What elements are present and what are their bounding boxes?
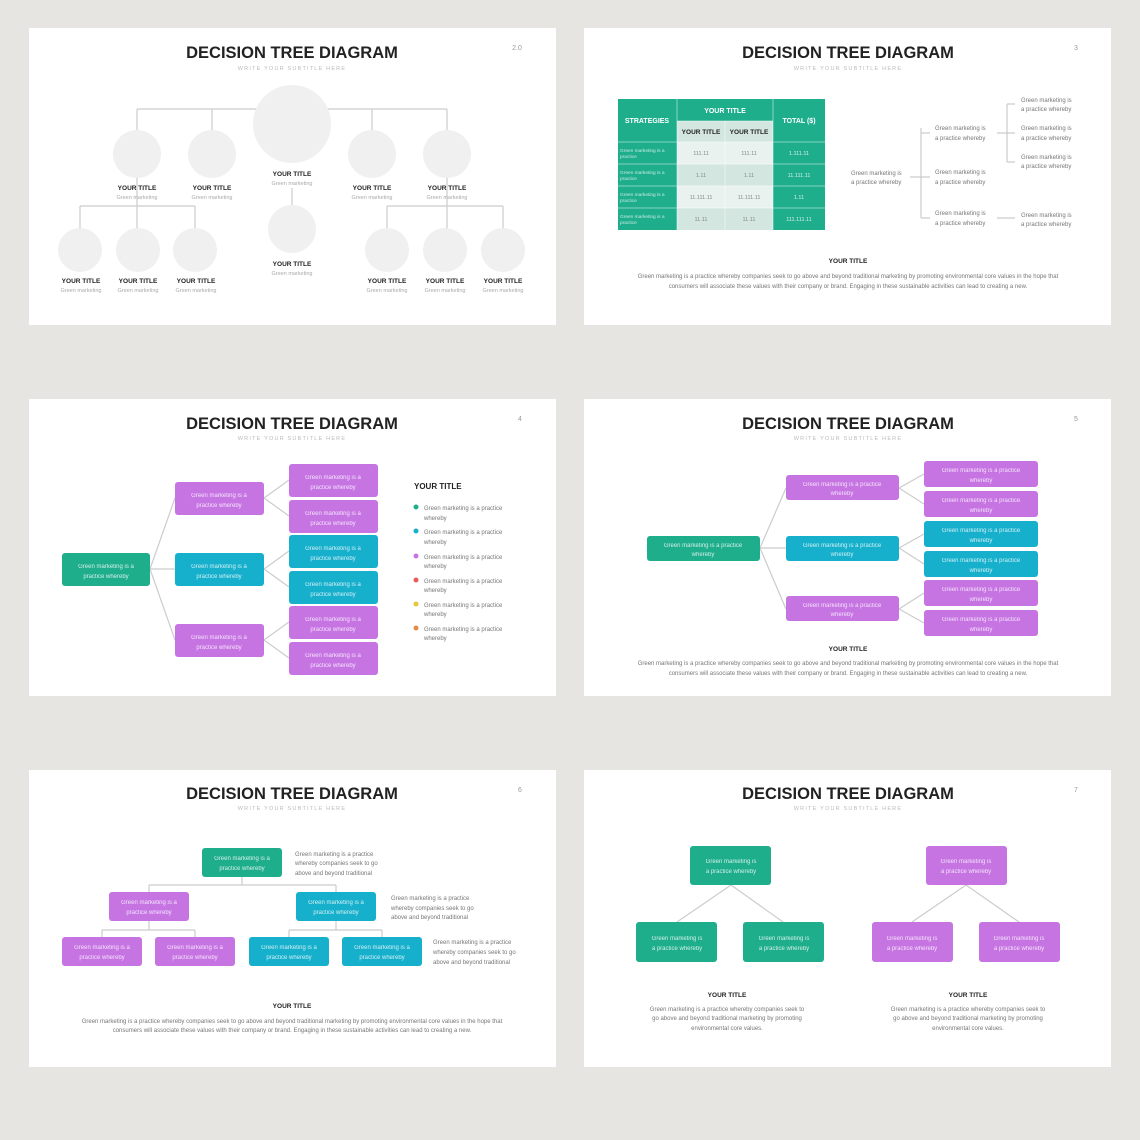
- tree boxes: Green marketing is a practice: [942, 498, 1021, 504]
- legend: whereby: [423, 516, 447, 522]
- purple tree: Green marketing is: [941, 859, 991, 865]
- tree boxes: whereby: [969, 508, 992, 514]
- side notes: above and beyond traditional: [433, 960, 510, 966]
- bracket tree: [851, 98, 1072, 228]
- node labels: Green marketing: [425, 288, 465, 294]
- table: 11.111.11: [788, 173, 810, 179]
- tree boxes: Green marketing is a: [78, 564, 135, 570]
- bracket tree: a practice whereby: [1021, 136, 1071, 142]
- legend: whereby: [423, 636, 447, 642]
- text blocks: Green marketing is a practice whereby companies seek to: [891, 1007, 1046, 1013]
- title: DECISION TREE DIAGRAM: [186, 415, 398, 433]
- page number: 7: [1074, 787, 1078, 794]
- table: 11.111.11: [690, 195, 712, 201]
- text blocks: Green marketing is a practice whereby companies seek to: [650, 1007, 805, 1013]
- tree boxes: Green marketing is a practice: [803, 603, 882, 609]
- bracket tree: a practice whereby: [1021, 107, 1071, 113]
- tree boxes: Green marketing is a practice: [942, 617, 1021, 623]
- table: 11.11: [743, 217, 755, 223]
- node labels: YOUR TITLE: [119, 278, 158, 285]
- table: 111.11: [693, 151, 709, 157]
- tree boxes: Green marketing is a practice: [803, 543, 882, 549]
- node labels: Green marketing: [483, 288, 523, 294]
- text block: Green marketing is a practice whereby companies seek to go above and beyond traditional marketing by promoting environmental core values in the hope that: [638, 661, 1059, 667]
- node labels: YOUR TITLE: [193, 185, 232, 192]
- green tree: Green marketing is: [652, 936, 702, 942]
- green tree: a practice whereby: [706, 869, 756, 875]
- table: 1.11: [696, 173, 706, 179]
- legend: whereby: [423, 564, 447, 570]
- bracket tree: Green marketing is: [851, 171, 902, 177]
- tree boxes: Green marketing is a: [305, 546, 362, 552]
- legend: Green marketing is a practice: [424, 506, 503, 512]
- subtitle: WRITE YOUR SUBTITLE HERE: [238, 806, 346, 812]
- node labels: Green marketing: [272, 271, 312, 277]
- tree boxes: practice whereby: [196, 645, 242, 651]
- text block: [82, 1003, 503, 1034]
- node labels: Green marketing: [176, 288, 216, 294]
- table: YOUR TITLE: [730, 129, 769, 136]
- tree boxes: Green marketing is a practice: [942, 558, 1021, 564]
- node labels: YOUR TITLE: [273, 261, 312, 268]
- text block: YOUR TITLE: [829, 646, 868, 653]
- side notes: whereby companies seek to go: [294, 861, 378, 867]
- tree boxes: practice whereby: [310, 663, 356, 669]
- text block: [638, 646, 1059, 677]
- node labels: YOUR TITLE: [428, 185, 467, 192]
- node labels: YOUR TITLE: [368, 278, 407, 285]
- tree boxes: Green marketing is a: [305, 617, 362, 623]
- tree boxes: practice whereby: [126, 910, 172, 916]
- bracket tree: Green marketing is: [935, 170, 986, 176]
- tree boxes: practice whereby: [172, 955, 218, 961]
- bracket tree: Green marketing is: [1021, 213, 1072, 219]
- tree boxes: practice whereby: [310, 485, 356, 491]
- table: [618, 99, 825, 230]
- title: DECISION TREE DIAGRAM: [186, 785, 398, 803]
- tree boxes: practice whereby: [79, 955, 125, 961]
- tree boxes: practice whereby: [196, 574, 242, 580]
- tree boxes: Green marketing is a: [305, 653, 362, 659]
- table: 1.11: [794, 195, 804, 201]
- tree boxes: Green marketing is a: [121, 900, 178, 906]
- bracket tree: a practice whereby: [851, 180, 901, 186]
- tree boxes: whereby: [830, 612, 853, 618]
- legend: whereby: [423, 612, 447, 618]
- text block: Green marketing is a practice whereby companies seek to go above and beyond traditional marketing by promoting environmental core values in the hope that: [638, 274, 1059, 280]
- subtitle: WRITE YOUR SUBTITLE HERE: [794, 66, 902, 72]
- title: DECISION TREE DIAGRAM: [186, 44, 398, 62]
- bracket tree: Green marketing is: [1021, 126, 1072, 132]
- legend: Green marketing is a practice: [424, 555, 503, 561]
- purple tree: [872, 846, 1060, 962]
- tree boxes: Green marketing is a: [354, 945, 411, 951]
- bracket tree: a practice whereby: [1021, 222, 1071, 228]
- side notes: Green marketing is a practice: [433, 940, 512, 946]
- purple tree: a practice whereby: [994, 946, 1044, 952]
- text block: [638, 258, 1059, 290]
- legend: whereby: [423, 588, 447, 594]
- tree boxes: Green marketing is a practice: [942, 468, 1021, 474]
- text blocks: [650, 992, 1046, 1032]
- table: TOTAL ($): [782, 118, 816, 125]
- node labels: YOUR TITLE: [62, 278, 101, 285]
- title: DECISION TREE DIAGRAM: [742, 785, 954, 803]
- page number: 4: [518, 416, 522, 423]
- node labels: Green marketing: [192, 195, 232, 201]
- bracket tree: Green marketing is: [935, 126, 986, 132]
- legend: Green marketing is a practice: [424, 579, 503, 585]
- table: YOUR TITLE: [704, 108, 746, 115]
- node labels: Green marketing: [118, 288, 158, 294]
- tree boxes: Green marketing is a: [191, 564, 248, 570]
- tree boxes: Green marketing is a practice: [942, 528, 1021, 534]
- node labels: Green marketing: [367, 288, 407, 294]
- tree boxes: practice whereby: [310, 521, 356, 527]
- tree boxes: whereby: [691, 552, 714, 558]
- side notes: whereby companies seek to go: [390, 906, 474, 912]
- node labels: Green marketing: [352, 195, 392, 201]
- table: practice: [620, 198, 637, 204]
- side notes: above and beyond traditional: [391, 915, 468, 921]
- table: practice: [620, 176, 637, 182]
- panel: slide 7 two small trees: [584, 770, 1111, 1067]
- purple tree: Green marketing is: [994, 936, 1044, 942]
- node labels: YOUR TITLE: [118, 185, 157, 192]
- node labels: Green marketing: [427, 195, 467, 201]
- tree boxes: Green marketing is a: [74, 945, 131, 951]
- tree boxes: [647, 461, 1038, 636]
- subtitle: WRITE YOUR SUBTITLE HERE: [794, 436, 902, 442]
- side notes: whereby companies seek to go: [432, 950, 516, 956]
- side notes: above and beyond traditional: [295, 871, 372, 877]
- legend: [414, 482, 503, 642]
- table: practice: [620, 154, 637, 160]
- tree boxes: Green marketing is a: [261, 945, 318, 951]
- tree boxes: whereby: [969, 627, 992, 633]
- purple tree: Green marketing is: [887, 936, 937, 942]
- bracket tree: a practice whereby: [1021, 164, 1071, 170]
- table: 11.11: [695, 217, 707, 223]
- tree boxes: Green marketing is a: [191, 635, 248, 641]
- tree boxes: practice whereby: [83, 574, 129, 580]
- page number: 5: [1074, 416, 1078, 423]
- title: DECISION TREE DIAGRAM: [742, 44, 954, 62]
- side notes: [294, 852, 516, 966]
- panel: slide 4 horizontal tree with legend: [29, 399, 556, 696]
- text blocks: go above and beyond traditional marketing by promoting: [652, 1016, 802, 1022]
- legend: Green marketing is a practice: [424, 530, 503, 536]
- tree boxes: [62, 464, 378, 675]
- page number: 3: [1074, 45, 1078, 52]
- table: 1.11: [744, 173, 754, 179]
- tree boxes: whereby: [830, 491, 853, 497]
- purple tree: a practice whereby: [887, 946, 937, 952]
- panel: slide 5 horizontal tree: [584, 399, 1111, 696]
- table: Green marketing is a: [620, 192, 665, 198]
- green tree: Green marketing is: [706, 859, 756, 865]
- text block: YOUR TITLE: [273, 1003, 312, 1010]
- text blocks: environmental core values.: [691, 1026, 763, 1032]
- bracket tree: a practice whereby: [935, 221, 985, 227]
- bracket tree: Green marketing is: [935, 211, 986, 217]
- text block: YOUR TITLE: [829, 258, 868, 265]
- node labels: YOUR TITLE: [426, 278, 465, 285]
- tree boxes: whereby: [969, 568, 992, 574]
- node labels: YOUR TITLE: [484, 278, 523, 285]
- legend: Green marketing is a practice: [424, 627, 503, 633]
- tree boxes: practice whereby: [313, 910, 359, 916]
- green tree: a practice whereby: [759, 946, 809, 952]
- table: Green marketing is a: [620, 170, 665, 176]
- green tree: Green marketing is: [759, 936, 809, 942]
- tree boxes: Green marketing is a: [305, 511, 362, 517]
- tree boxes: Green marketing is a: [214, 856, 271, 862]
- tree boxes: practice whereby: [310, 556, 356, 562]
- node labels: Green marketing: [117, 195, 157, 201]
- table: 1.111.11: [789, 151, 809, 157]
- table: Green marketing is a: [620, 148, 665, 154]
- bracket tree: a practice whereby: [935, 136, 985, 142]
- tree boxes: practice whereby: [219, 866, 265, 872]
- title: DECISION TREE DIAGRAM: [742, 415, 954, 433]
- green tree: [636, 846, 824, 962]
- table: practice: [620, 220, 637, 226]
- node labels: YOUR TITLE: [177, 278, 216, 285]
- tree boxes: [62, 848, 422, 966]
- legend: Green marketing is a practice: [424, 603, 503, 609]
- table: 111.11: [741, 151, 757, 157]
- page number: 2.0: [512, 45, 522, 52]
- text block: consumers will associate these values with their company or brand. Engaging in these sustainable activities can lead to creating a new.: [669, 284, 1028, 290]
- tree boxes: practice whereby: [310, 592, 356, 598]
- table: 111.111.11: [786, 217, 812, 223]
- node labels: Green marketing: [272, 181, 312, 187]
- bracket tree: Green marketing is: [1021, 155, 1072, 161]
- text block: Green marketing is a practice whereby companies seek to go above and beyond traditional marketing by promoting environmental core values in the hope that: [82, 1019, 503, 1025]
- tree boxes: Green marketing is a: [308, 900, 365, 906]
- node labels: YOUR TITLE: [353, 185, 392, 192]
- tree boxes: Green marketing is a: [167, 945, 224, 951]
- tree boxes: whereby: [969, 597, 992, 603]
- text blocks: go above and beyond traditional marketing by promoting: [893, 1016, 1043, 1022]
- node labels: [61, 171, 523, 294]
- table: STRATEGIES: [625, 118, 669, 125]
- green tree: a practice whereby: [652, 946, 702, 952]
- circles: [58, 85, 525, 272]
- tree boxes: Green marketing is a: [305, 475, 362, 481]
- subtitle: WRITE YOUR SUBTITLE HERE: [238, 66, 346, 72]
- node labels: YOUR TITLE: [273, 171, 312, 178]
- tree boxes: Green marketing is a practice: [664, 543, 743, 549]
- tree boxes: Green marketing is a practice: [803, 482, 882, 488]
- tree boxes: practice whereby: [266, 955, 312, 961]
- side notes: Green marketing is a practice: [295, 852, 374, 858]
- legend: YOUR TITLE: [414, 482, 462, 491]
- node labels: Green marketing: [61, 288, 101, 294]
- text block: consumers will associate these values with their company or brand. Engaging in these sustainable activities can lead to creating a new.: [113, 1028, 472, 1034]
- bracket tree: Green marketing is: [1021, 98, 1072, 104]
- tree boxes: whereby: [969, 538, 992, 544]
- purple tree: a practice whereby: [941, 869, 991, 875]
- panel: slide 6 vertical org tree: [29, 770, 556, 1067]
- panel: slide 2.0 circle tree: [29, 28, 556, 325]
- text blocks: YOUR TITLE: [708, 992, 747, 999]
- table: Green marketing is a: [620, 214, 665, 220]
- text blocks: YOUR TITLE: [949, 992, 988, 999]
- text block: consumers will associate these values with their company or brand. Engaging in these sustainable activities can lead to creating a new.: [669, 671, 1028, 677]
- tree boxes: Green marketing is a practice: [942, 587, 1021, 593]
- tree boxes: practice whereby: [310, 627, 356, 633]
- panel: slide 3 table and bracket tree: [584, 28, 1111, 325]
- tree boxes: Green marketing is a: [305, 582, 362, 588]
- bracket tree: a practice whereby: [935, 180, 985, 186]
- tree boxes: whereby: [969, 478, 992, 484]
- table: 11.111.11: [738, 195, 760, 201]
- side notes: Green marketing is a practice: [391, 896, 470, 902]
- tree boxes: whereby: [830, 552, 853, 558]
- tree boxes: practice whereby: [196, 503, 242, 509]
- legend: whereby: [423, 540, 447, 546]
- tree boxes: Green marketing is a: [191, 493, 248, 499]
- table: YOUR TITLE: [682, 129, 721, 136]
- text blocks: environmental core values.: [932, 1026, 1004, 1032]
- subtitle: WRITE YOUR SUBTITLE HERE: [238, 436, 346, 442]
- page number: 6: [518, 787, 522, 794]
- subtitle: WRITE YOUR SUBTITLE HERE: [794, 806, 902, 812]
- tree boxes: practice whereby: [359, 955, 405, 961]
